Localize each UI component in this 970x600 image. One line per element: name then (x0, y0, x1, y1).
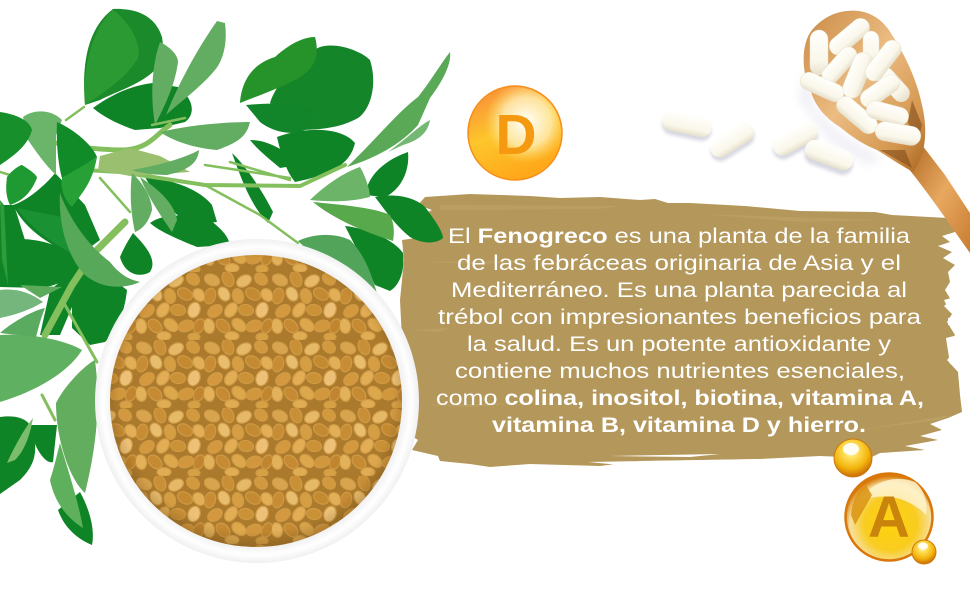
spoon bowl (804, 11, 925, 172)
light leaves (0, 21, 450, 528)
dark back leaves (0, 83, 443, 545)
icon: vitamin D sphere (468, 86, 562, 180)
icon: small vitamin sphere lower (912, 540, 936, 564)
top dark leaf pairs (17, 9, 373, 255)
text block: description of fenugreek: Mediterráneo. Es una planta parecida al (451, 279, 907, 302)
text block: description of fenugreek: contiene muchos nutrientes esenciales, (455, 360, 905, 383)
illustration: fenugreek plant (0, 9, 450, 545)
illustration: wooden spoon with capsules (797, 11, 970, 253)
seeds (110, 255, 402, 547)
icon: vitamin A sphere (846, 474, 936, 564)
text block: description of fenugreek: vitamina B, vitamina D y hierro. (492, 414, 866, 437)
icon: vitamin A sphere: A (868, 485, 910, 550)
text block: description of fenugreek: como colina, inositol, biotina, vitamina A, (436, 387, 924, 410)
stems (0, 107, 345, 420)
bright green leaves (0, 112, 97, 285)
stem cluster (98, 148, 190, 176)
text block: description of fenugreek: la salud. Es un potente antioxidante y (467, 333, 892, 356)
text block: description of fenugreek: El Fenogreco es una planta de la familia (448, 225, 910, 248)
text block: description of fenugreek: trébol con impresionantes beneficios para (438, 306, 921, 329)
spoon handle (908, 145, 970, 253)
icon: loose capsules (660, 109, 856, 178)
panel: brushed gold text background (400, 194, 962, 467)
text block: description of fenugreek: de las febráceas originaria de Asia y el (457, 252, 901, 275)
icon: vitamin D sphere: D (495, 103, 537, 167)
illustration: bowl of fenugreek seeds (95, 239, 419, 563)
icon: small vitamin sphere upper (834, 439, 872, 477)
text block: description of fenugreek (436, 225, 924, 437)
bowl (95, 239, 419, 563)
capsules in spoon (797, 15, 922, 147)
